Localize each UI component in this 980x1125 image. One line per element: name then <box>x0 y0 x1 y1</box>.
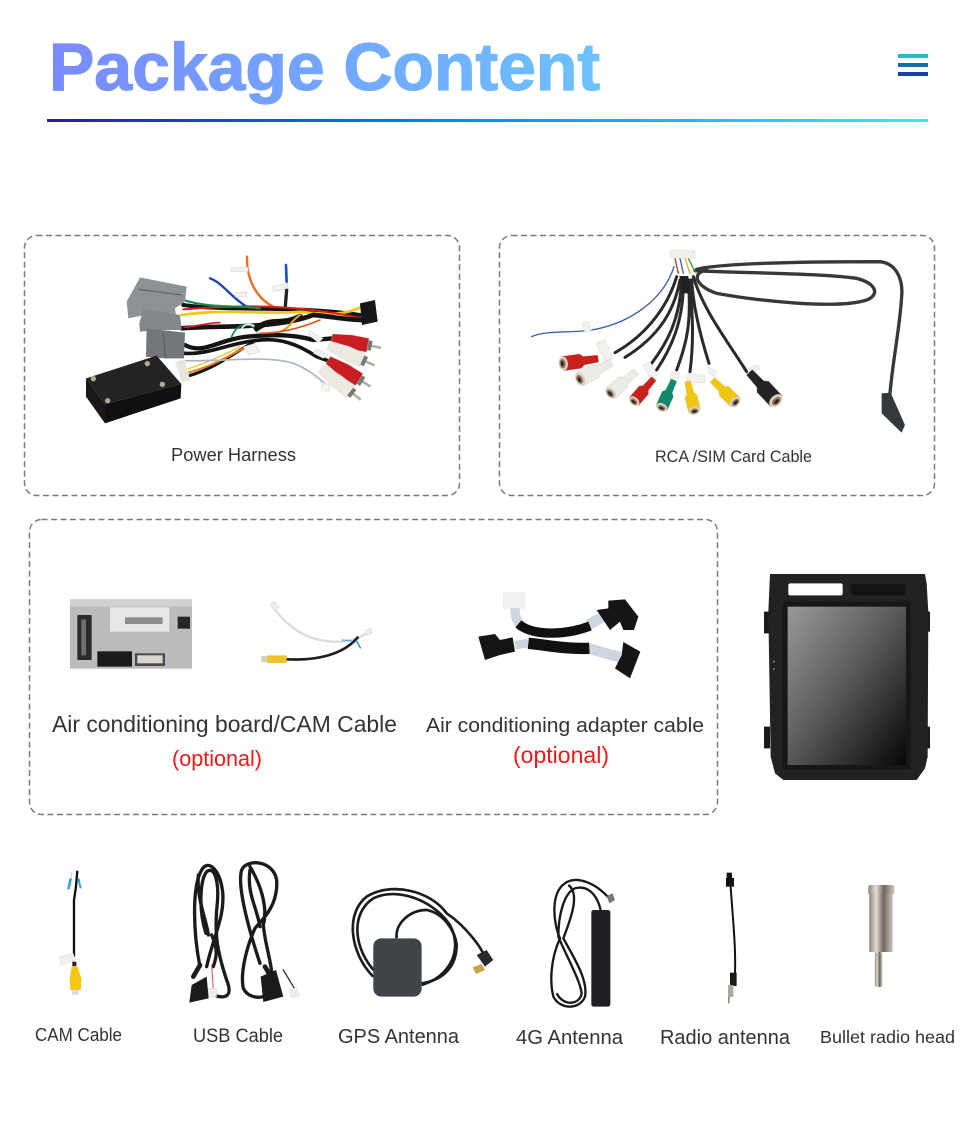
label: CAM cable: CAM Cable <box>35 1025 122 1045</box>
label: USB cable: USB Cable <box>193 1026 283 1047</box>
icon: CAM cable <box>59 871 81 995</box>
icon: air conditioning adapter cable <box>478 593 640 678</box>
icon: power harness <box>86 257 382 423</box>
label: adapter cable: Air conditioning adapter cable <box>426 714 704 737</box>
panel: RCA / SIM card cable <box>500 236 934 496</box>
label: optional right: (optional) <box>513 742 609 768</box>
label: optional left: (optional) <box>172 746 262 771</box>
item: GPS antenna <box>338 889 493 1048</box>
icon: RCA and SIM cable <box>532 250 905 433</box>
title underline <box>47 119 928 122</box>
icon: bullet radio head <box>868 885 894 987</box>
title: Package Content <box>49 30 600 105</box>
item: CAM cable <box>35 871 122 1045</box>
item: bullet radio head <box>820 885 955 1047</box>
label: radio antenna: Radio antenna <box>660 1026 791 1049</box>
label: GPS antenna: GPS Antenna <box>338 1025 460 1048</box>
icon: head unit screen <box>764 574 930 780</box>
icon: GPS antenna <box>353 889 493 997</box>
icon: 4G antenna <box>551 880 615 1007</box>
item: 4G antenna <box>516 880 624 1049</box>
label: bullet radio head: Bullet radio head <box>820 1027 955 1047</box>
label: 4G antenna: 4G Antenna <box>516 1026 624 1049</box>
icon: USB cables <box>189 863 299 1003</box>
icon: air conditioning board <box>70 599 192 669</box>
label: power harness: Power Harness <box>171 445 296 465</box>
icon: menu <box>898 54 928 76</box>
panel: optional accessories <box>30 520 718 814</box>
item: USB cable <box>189 863 299 1047</box>
panel: power harness <box>24 236 460 496</box>
icon: radio antenna <box>726 873 737 1003</box>
label: RCA / SIM card cable: RCA /SIM Card Cable <box>655 448 812 466</box>
item: radio antenna <box>660 873 791 1049</box>
icon: CAM cable <box>261 602 372 663</box>
label: board and CAM cable: Air conditioning board/CAM Cable <box>52 711 397 737</box>
